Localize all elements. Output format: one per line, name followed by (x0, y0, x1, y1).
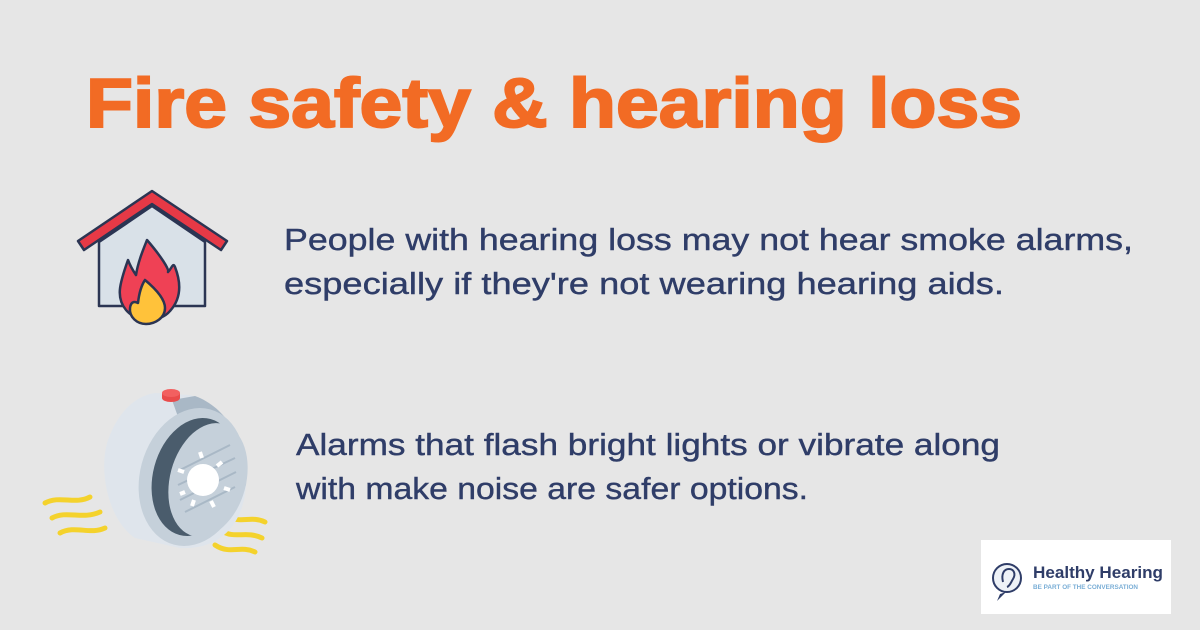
text block 1: especially if they're not wearing hearing aids. (284, 266, 1004, 301)
logo: Healthy Hearing (981, 540, 1171, 614)
logo: Healthy Hearing: BE PART OF THE CONVERSATION (1033, 585, 1138, 591)
logo: Healthy Hearing: Healthy Hearing (1033, 563, 1163, 582)
text block 2 (295, 427, 1000, 506)
flame (120, 240, 179, 320)
title: Fire safety & hearing loss (86, 64, 1022, 142)
icon: smoke alarm (45, 389, 265, 558)
text block 1 (284, 222, 1133, 301)
icon: house on fire (78, 191, 227, 324)
text block 2: with make noise are safer options. (295, 471, 808, 506)
text block 1: People with hearing loss may not hear smoke alarms, (284, 222, 1133, 257)
text block 2: Alarms that flash bright lights or vibrate along (296, 427, 1000, 462)
